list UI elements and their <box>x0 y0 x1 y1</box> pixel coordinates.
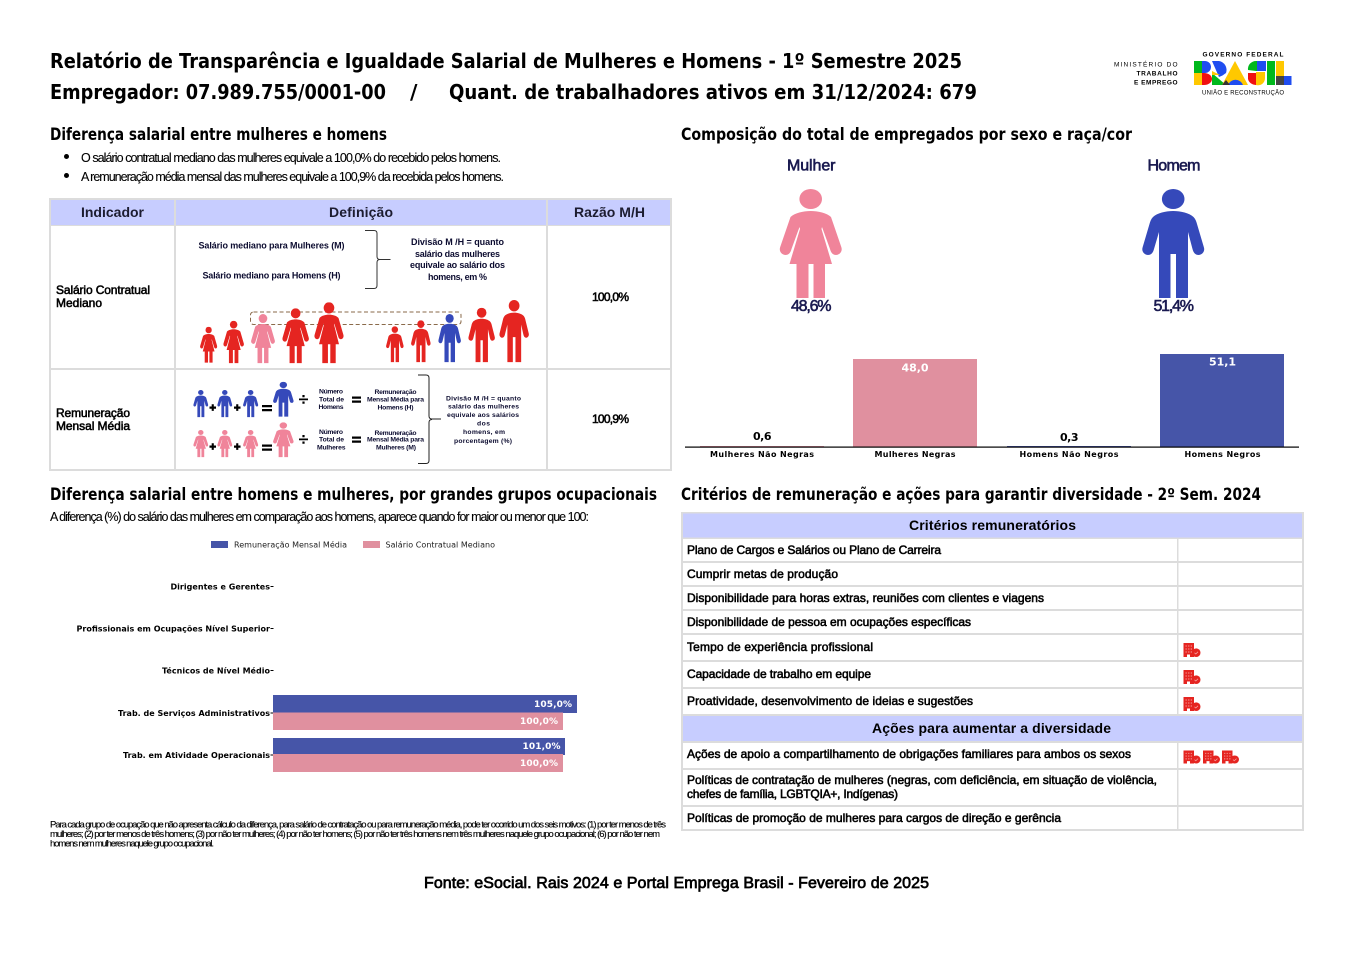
table: critérios e ações <box>681 512 1304 831</box>
definition diagram: remuneração média: Mulheres (M) <box>376 444 416 452</box>
bar chart: sexo e raça/cor: 51,1 <box>1209 356 1236 368</box>
definition diagram: remuneração média: salário das mulheres <box>448 404 519 410</box>
row label: salário contratual mediano <box>56 283 150 310</box>
definition diagram: salário mediano <box>198 230 529 363</box>
definition diagram: salário mediano: Salário mediano para Homens (H) <box>202 270 340 280</box>
row label: remuneração mensal média: Mensal Média <box>56 419 130 433</box>
action rows <box>687 747 1157 825</box>
definition diagram: remuneração média: Divisão M /H = quanto <box>446 396 521 402</box>
bar chart: grupos ocupacionais: 101,0% <box>522 742 560 752</box>
table header <box>81 204 645 220</box>
bar chart: sexo e raça/cor: Homens Não Negros <box>1020 450 1119 459</box>
definition diagram: remuneração média: Mensal Média para <box>367 396 424 404</box>
value: razão remuneração: 100,9% <box>592 412 629 426</box>
heading: grandes grupos ocupacionais: Diferença salarial entre homens e mulheres, por grandes grupos ocupacionais <box>50 485 657 504</box>
table header: Indicador <box>81 204 145 220</box>
figure: mulher: 48,6% <box>791 298 832 315</box>
bar chart: grupos ocupacionais <box>76 582 577 772</box>
legend: Salário Contratual Mediano <box>386 540 495 550</box>
bar chart: sexo e raça/cor: Homens Negros <box>1184 450 1261 459</box>
logo: ministério and governo federal: MINISTÉRIO DO <box>1114 60 1178 68</box>
icon: men sum <box>193 382 294 417</box>
title <box>50 49 977 104</box>
title: Relatório de Transparência e Igualdade Salarial de Mulheres e Homens - 1º Semestre 2025 <box>50 49 962 73</box>
footnote: mulheres; (2) por ter menos de três homens; (3) por não ter mulheres; (4) por não ter homens; (5) por não ter três homens nem três mulheres naquele grupo ocupacional; (6) por não ter nem <box>50 829 660 840</box>
bar chart: grupos ocupacionais: 100,0% <box>520 717 558 727</box>
bar chart: grupos ocupacionais: 105,0% <box>534 700 572 710</box>
figure: homem: 51,4% <box>1154 298 1194 315</box>
heading: diferença salarial: Diferença salarial entre mulheres e homens <box>50 125 387 144</box>
definition diagram: salário mediano: Salário mediano para Mulheres (M) <box>198 240 344 250</box>
definition diagram: remuneração média <box>193 375 521 464</box>
bar chart: grupos ocupacionais: Dirigentes e Gerentes <box>170 582 270 592</box>
criteria rows: Cumprir metas de produção <box>687 567 838 581</box>
bar chart: sexo e raça/cor: 48,0 <box>902 362 929 374</box>
source: Fonte: eSocial. Rais 2024 e Portal Emprega Brasil - Fevereiro de 2025 <box>424 875 929 892</box>
action rows: chefes de família, LGBTQIA+, Indígenas) <box>687 787 898 801</box>
bar chart: grupos ocupacionais: Trab. em Atividade Operacionais <box>123 751 270 760</box>
footnote <box>50 820 666 850</box>
heading: composição: Composição do total de empregados por sexo e raça/cor <box>681 125 1133 144</box>
definition diagram: remuneração média: Mulheres <box>317 444 346 452</box>
action rows: Ações de apoio a compartilhamento de obrigações familiares para ambos os sexos <box>687 747 1131 761</box>
row label: salário contratual mediano: Mediano <box>56 296 102 310</box>
definition diagram: salário mediano: salário das mulheres <box>415 249 500 259</box>
criteria rows <box>687 543 1044 708</box>
definition diagram: remuneração média: Número <box>319 429 343 436</box>
definition diagram: salário mediano: equivale ao salário dos <box>410 260 505 270</box>
footnote: Para cada grupo de ocupação que não apresenta cálculo da diferença, para salário de contratação ou para remuneração média, pode ter ocorrido um dos seis motivos: (1) por ter menos de três <box>50 820 666 830</box>
definition diagram: remuneração média: Homens (H) <box>378 404 414 412</box>
figure: mulher: Mulher <box>787 158 836 174</box>
definition diagram: remuneração média: Número <box>319 388 343 396</box>
bar chart: sexo e raça/cor: 0,6 <box>753 430 772 443</box>
definition diagram: remuneração média: Mensal Média para <box>367 436 424 444</box>
bar chart: grupos ocupacionais: 100,0% <box>520 759 558 769</box>
table: indicadores <box>49 198 672 471</box>
title: Empregador: 07.989.755/0001-00 <box>50 80 386 104</box>
criteria rows: Proatividade, desenvolvimento de ideias e sugestões <box>687 694 973 708</box>
icon: men figures <box>386 300 529 362</box>
icons: critérios <box>1184 643 1200 711</box>
figure: homem: Homem <box>1148 158 1200 174</box>
definition diagram: remuneração média: Homens <box>318 404 344 411</box>
bullet list: A remuneração média mensal das mulheres equivale a 100,9% da recebida pelos homens. <box>81 170 504 184</box>
bar chart: grupos ocupacionais: Trab. de Serviços Administrativos <box>118 709 270 718</box>
title: / <box>410 80 418 104</box>
definition diagram: remuneração média: Remuneração <box>374 430 416 437</box>
legend <box>211 540 495 550</box>
logo: ministério and governo federal: TRABALHO <box>1136 70 1178 78</box>
table header: Razão M/H <box>574 204 645 220</box>
bar chart: sexo e raça/cor <box>685 354 1299 459</box>
bullet list: O salário contratual mediano das mulheres equivale a 100,0% do recebido pelos homens. <box>81 151 501 165</box>
criteria rows: Disponibilidade de pessoa em ocupações específicas <box>687 615 971 629</box>
definition diagram: salário mediano: homens, em % <box>428 272 487 282</box>
header: critérios remuneratórios: Critérios remuneratórios <box>909 517 1076 533</box>
header: ações: Ações para aumentar a diversidade <box>872 720 1111 736</box>
action rows: Políticas de contratação de mulheres (negras, com deficiência, em situação de violência, <box>687 773 1157 787</box>
definition diagram: remuneração média: equivale aos salários <box>447 412 519 419</box>
definition diagram: remuneração média: Remuneração <box>374 389 416 396</box>
bar chart: sexo e raça/cor: Mulheres Negras <box>874 450 956 459</box>
legend: Remuneração Mensal Média <box>234 540 347 550</box>
subtitle: A diferença (%) do salário das mulheres em comparação aos homens, aparece quando for maior ou menor que 100: <box>50 510 589 524</box>
figure: mulher <box>780 158 842 315</box>
criteria rows: Capacidade de trabalho em equipe <box>687 667 871 681</box>
definition diagram: remuneração média: Total de <box>319 436 344 444</box>
operators <box>210 395 361 451</box>
footnote: homens nem mulheres naquele grupo ocupacional. <box>50 838 214 850</box>
definition diagram: remuneração média: Total de <box>319 396 344 404</box>
bar chart: sexo e raça/cor: 0,3 <box>1060 431 1078 444</box>
logo: ministério and governo federal: GOVERNO FEDERAL <box>1202 52 1284 58</box>
row label: remuneração mensal média: Remuneração <box>56 406 130 420</box>
logo: ministério and governo federal <box>1114 52 1292 96</box>
action rows: Políticas de promoção de mulheres para cargos de direção e gerência <box>687 811 1061 825</box>
icon: women sum <box>193 422 294 457</box>
definition diagram: salário mediano: Divisão M /H = quanto <box>411 237 504 247</box>
definition diagram: remuneração média: porcentagem (%) <box>454 438 512 445</box>
definition diagram: remuneração média: homens, em <box>463 429 505 436</box>
criteria rows: Tempo de experiência profissional <box>687 640 873 654</box>
icon: women figures <box>200 302 344 363</box>
title: Quant. de trabalhadores ativos em 31/12/2024: 679 <box>449 80 977 104</box>
definition diagram: remuneração média: dos <box>477 420 490 428</box>
bullet list <box>64 151 504 184</box>
table header: Definição <box>329 204 393 220</box>
row label: remuneração mensal média <box>56 406 130 433</box>
logo: ministério and governo federal: E EMPREGO <box>1134 80 1178 86</box>
row label: salário contratual mediano: Salário Contratual <box>56 283 150 297</box>
bar chart: grupos ocupacionais: Técnicos de Nível Médio <box>162 666 270 676</box>
icons: ações <box>1184 750 1239 764</box>
criteria rows: Plano de Cargos e Salários ou Plano de Carreira <box>687 543 941 557</box>
criteria rows: Disponibilidade para horas extras, reuniões com clientes e viagens <box>687 591 1044 605</box>
bar chart: sexo e raça/cor: Mulheres Não Negras <box>710 450 814 459</box>
figure: homem <box>1142 158 1204 315</box>
bar chart: grupos ocupacionais: Profissionais em Ocupações Nível Superior <box>76 624 270 634</box>
value: razão salário contratual: 100,0% <box>592 290 629 304</box>
logo: ministério and governo federal: UNIÃO E RECONSTRUÇÃO <box>1202 90 1284 96</box>
